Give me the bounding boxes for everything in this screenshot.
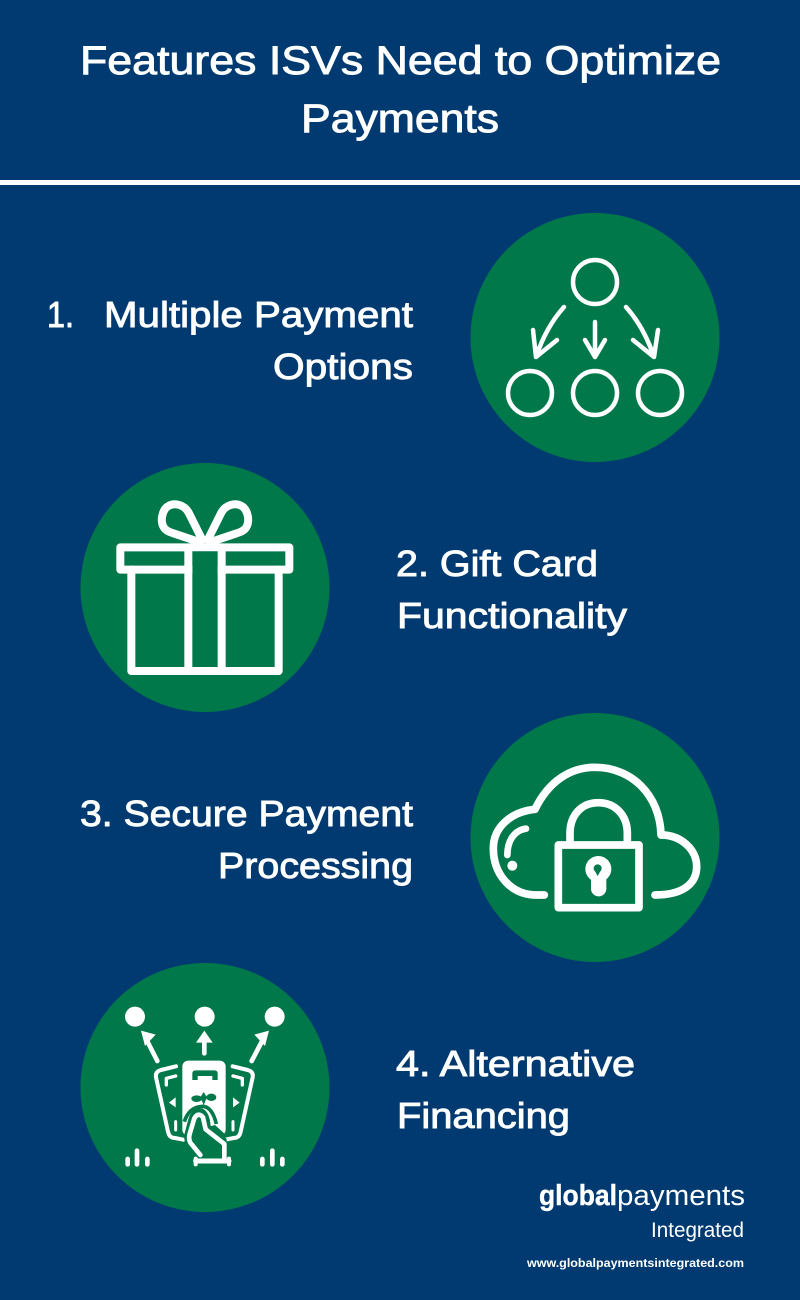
logo: global payments integrated — [539, 1180, 745, 1242]
icon: cards with hand and arrows — [80, 963, 330, 1212]
icon: gift box — [80, 463, 330, 712]
panel: multiple payment options — [47, 213, 720, 462]
heading: gift card functionality — [396, 543, 627, 636]
logo: global payments integrated: payments — [617, 1180, 745, 1212]
panel: alternative financing — [80, 963, 635, 1212]
heading: alternative financing: 4. Alternative — [396, 1043, 635, 1084]
icon: branching arrows — [470, 213, 720, 462]
website url: www.globalpaymentsintegrated.com — [526, 1256, 744, 1270]
heading: alternative financing: Financing — [397, 1095, 570, 1136]
icon: cloud with padlock — [470, 713, 720, 962]
title: Payments — [301, 97, 499, 141]
heading: gift card functionality: Functionality — [397, 595, 627, 636]
logo: global payments integrated: global — [539, 1180, 617, 1212]
heading: secure payment processing: 3. Secure Payment — [80, 793, 413, 834]
panel: secure payment processing — [80, 713, 720, 962]
heading: multiple payment options: 1. — [47, 294, 74, 335]
heading: secure payment processing — [80, 793, 413, 886]
logo: global payments integrated: Integrated — [651, 1219, 744, 1242]
panel: gift card functionality — [80, 463, 627, 712]
heading: secure payment processing: Processing — [218, 845, 413, 886]
heading: multiple payment options: Multiple Payment — [104, 294, 413, 335]
heading: gift card functionality: 2. Gift Card — [396, 543, 598, 584]
heading: alternative financing — [396, 1043, 635, 1136]
title: Features ISVs Need to Optimize — [80, 39, 721, 83]
heading: multiple payment options: Options — [273, 346, 413, 387]
heading: multiple payment options — [47, 294, 413, 387]
title — [80, 39, 721, 141]
